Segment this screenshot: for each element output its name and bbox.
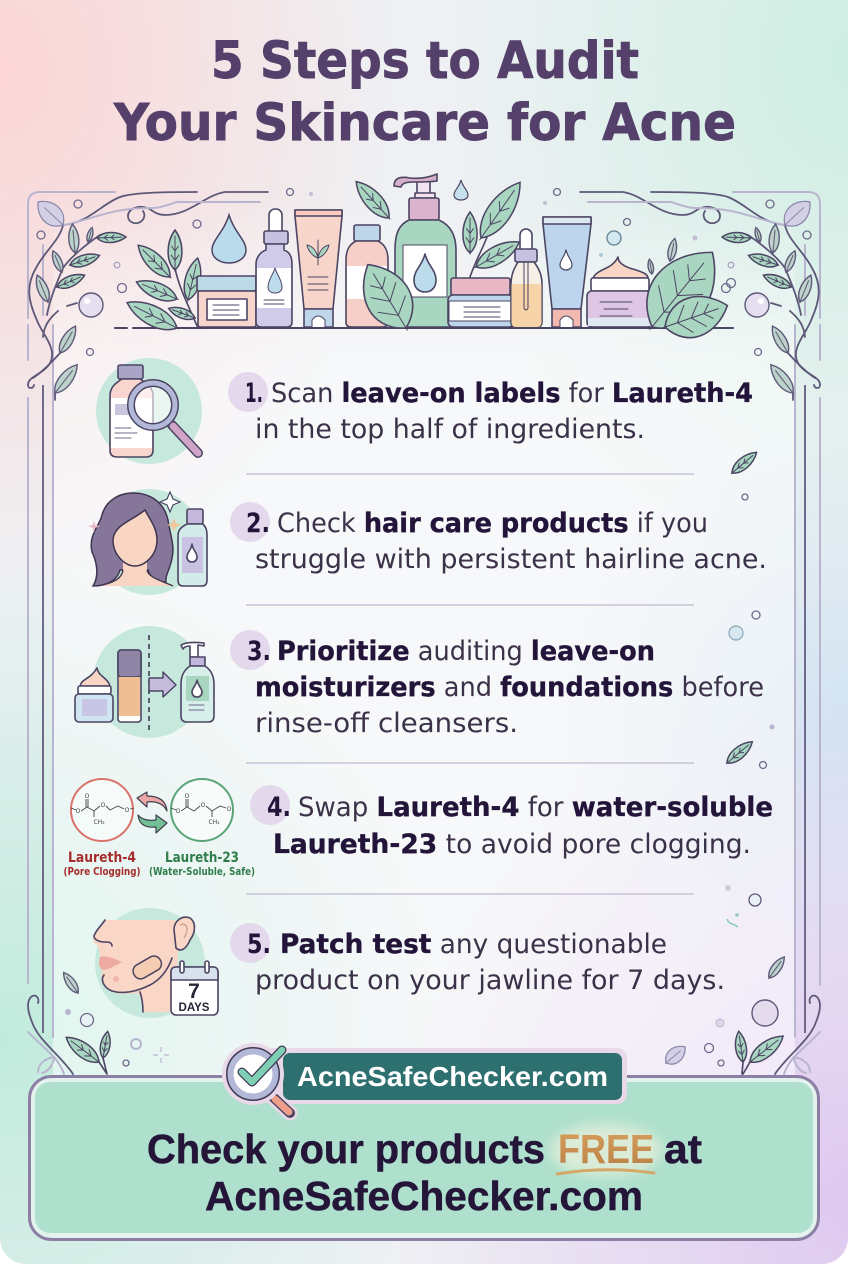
number badge 1 bbox=[228, 372, 268, 412]
step 2 icon: hair and bottle bbox=[88, 489, 207, 595]
step 4 text bbox=[250, 785, 773, 860]
inner panel background bbox=[53, 200, 795, 1075]
amber dropper bbox=[511, 229, 542, 327]
right-side leaves and bubbles bbox=[727, 448, 760, 478]
step 1 icon: bottle and magnifier bbox=[96, 358, 202, 464]
molecule labels bbox=[64, 850, 255, 878]
call-to-action text: Check your products bbox=[147, 1126, 545, 1172]
molecule labels: Laureth-4 bbox=[68, 850, 136, 866]
website badge: AcneSafeChecker.com bbox=[297, 1061, 608, 1092]
Laureth-4 molecule: O bbox=[76, 808, 81, 815]
step 3 text: Prioritize auditing leave-on bbox=[277, 636, 655, 667]
Laureth-23 molecule: CH₃ bbox=[208, 819, 220, 826]
step 2 text: 2. bbox=[246, 508, 270, 539]
floating leaf and drop bbox=[350, 176, 397, 225]
left leaves bbox=[123, 230, 205, 338]
Laureth-4 molecule: O bbox=[125, 807, 130, 814]
step 5 icon: face, patch and calendar: 7 bbox=[188, 980, 200, 1003]
swap arrows bbox=[137, 792, 167, 811]
Laureth-23 molecule: O bbox=[176, 808, 181, 815]
small floating dots bbox=[309, 192, 313, 196]
step 3 icon: leave-on before rinse-off bbox=[75, 626, 214, 738]
number badge 5 bbox=[230, 923, 270, 963]
step 1 text: in the top half of ingredients. bbox=[255, 414, 645, 445]
step 5 text: Patch test any questionable bbox=[280, 929, 667, 960]
FREE glow bbox=[550, 1124, 662, 1176]
call-to-action text: at bbox=[664, 1126, 702, 1172]
Laureth-23 molecule: O bbox=[227, 806, 232, 813]
Laureth-4 molecule bbox=[71, 779, 134, 841]
shelf line bbox=[115, 327, 733, 329]
Laureth-4 molecule: O bbox=[101, 802, 106, 809]
number badge 3 bbox=[230, 630, 270, 670]
divider bbox=[246, 604, 694, 606]
step 3 text bbox=[230, 630, 764, 739]
step 5 text bbox=[230, 923, 725, 996]
pink-lid jar bbox=[448, 278, 514, 327]
step 2 text: Check hair care products if you bbox=[277, 508, 708, 539]
molecule labels: (Water-Soluble, Safe) bbox=[149, 865, 255, 878]
title bbox=[113, 32, 736, 153]
serum bottle bbox=[256, 209, 292, 327]
call-to-action text bbox=[147, 1126, 702, 1219]
left-side leaves and bubbles bbox=[60, 970, 82, 996]
step 2 text: struggle with persistent hairline acne. bbox=[255, 544, 767, 575]
step 1 text: 1. bbox=[245, 378, 263, 409]
Laureth-4 molecule: CH₃ bbox=[93, 819, 105, 826]
blue tube bbox=[543, 217, 591, 327]
step 1 text: Scan leave-on labels for Laureth-4 bbox=[271, 378, 753, 409]
divider bbox=[246, 762, 694, 764]
step 3 text: rinse-off cleansers. bbox=[255, 708, 518, 739]
step 5 icon: face, patch and calendar: DAYS bbox=[178, 1000, 210, 1014]
step 5 text: 5. bbox=[247, 929, 271, 960]
step 2 text bbox=[230, 502, 767, 575]
divider bbox=[246, 473, 694, 475]
step 4 text: Swap Laureth-4 for water-soluble bbox=[298, 792, 773, 823]
Laureth-23 molecule: O bbox=[201, 802, 206, 809]
right leaves bbox=[627, 234, 735, 348]
title: 5 Steps to Audit bbox=[211, 32, 639, 91]
call-to-action text: AcneSafeChecker.com bbox=[205, 1173, 643, 1219]
front leaf bbox=[349, 253, 427, 342]
number badge 4 bbox=[250, 785, 290, 825]
step 3 text: moisturizers and foundations before bbox=[255, 672, 764, 703]
molecule labels: Laureth-23 bbox=[165, 850, 239, 866]
step 1 text bbox=[228, 372, 753, 445]
decorative frame bbox=[28, 188, 820, 1074]
step 5 text: product on your jawline for 7 days. bbox=[255, 965, 725, 996]
pink tube bbox=[295, 210, 342, 327]
pump bottle bbox=[394, 174, 456, 327]
step 4 text: Laureth-23 to avoid pore clogging. bbox=[273, 829, 751, 860]
pink bottle bbox=[346, 225, 388, 327]
title: Your Skincare for Acne bbox=[113, 94, 736, 153]
number badge 2 bbox=[230, 502, 270, 542]
step 3 text: 3. bbox=[247, 636, 271, 667]
step 5 icon: face, patch and calendar bbox=[93, 908, 218, 1018]
step 4 icon: molecules swap bbox=[64, 779, 255, 878]
Laureth-4 molecule: O bbox=[85, 793, 90, 800]
divider bbox=[246, 893, 694, 895]
water drop bbox=[212, 215, 246, 263]
website badge bbox=[222, 1043, 627, 1113]
cream jar bbox=[587, 257, 652, 327]
Laureth-23 molecule: O bbox=[185, 793, 190, 800]
step 4 text: 4. bbox=[267, 792, 291, 823]
call-to-action text: FREE bbox=[558, 1126, 654, 1172]
jar bbox=[197, 276, 256, 327]
Laureth-23 molecule bbox=[171, 779, 233, 841]
molecule labels: (Pore Clogging) bbox=[64, 865, 140, 878]
magnifier with check icon bbox=[222, 1043, 290, 1113]
mid branch bbox=[463, 176, 530, 277]
shelf with skincare products bbox=[115, 174, 735, 348]
call-to-action panel bbox=[30, 1076, 818, 1240]
